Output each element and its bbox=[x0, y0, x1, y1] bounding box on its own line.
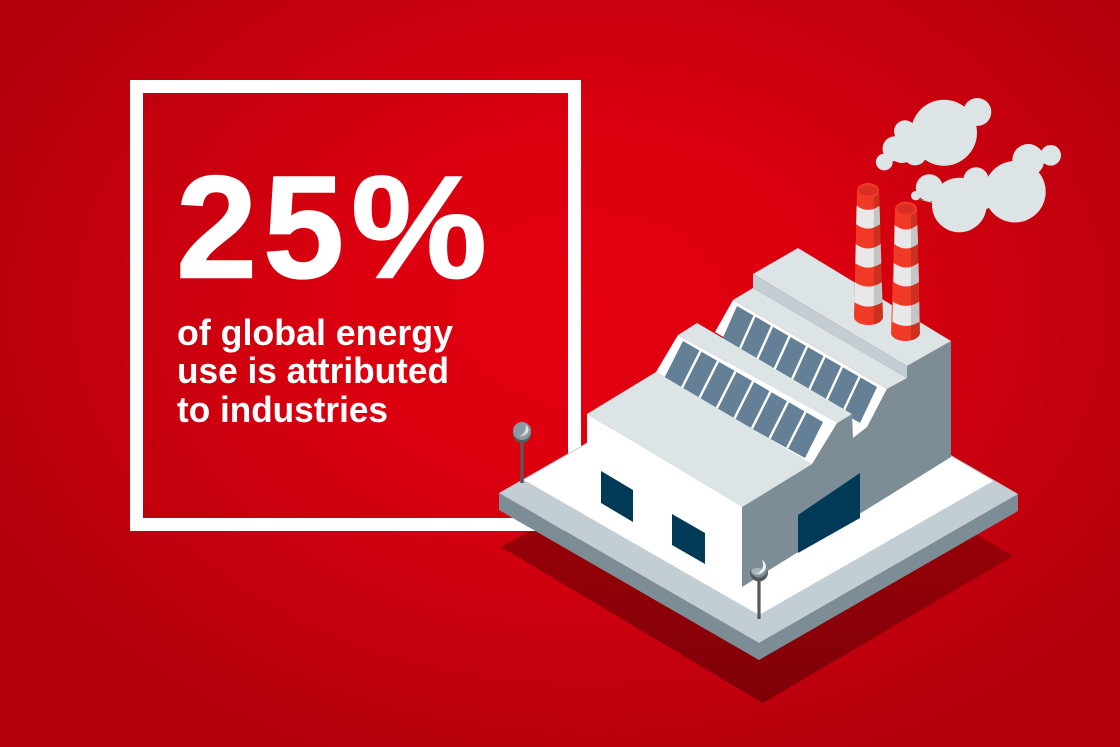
white slope behind rear solar row bbox=[715, 300, 887, 438]
description text bbox=[177, 312, 453, 430]
front roof bbox=[587, 372, 812, 507]
white slope behind front solar row bbox=[656, 335, 837, 464]
smoke cloud lower bbox=[911, 144, 1061, 232]
middle roof bbox=[733, 288, 907, 389]
headline: 25%: % bbox=[351, 146, 487, 308]
factory illustration bbox=[499, 98, 1061, 660]
lamp post left bbox=[513, 422, 531, 483]
window left bbox=[601, 471, 633, 522]
solar panels: rear row bbox=[721, 306, 877, 423]
window right bbox=[672, 514, 705, 564]
description text: to industries bbox=[177, 389, 388, 430]
solar panels: front row bbox=[663, 341, 823, 458]
chimney left bbox=[854, 183, 883, 325]
top roof bbox=[753, 248, 951, 366]
headline: 25%: 5 bbox=[263, 146, 344, 308]
headline: 25%: 2 bbox=[176, 146, 257, 308]
ground shadow bbox=[501, 470, 1013, 703]
headline: 25% bbox=[176, 146, 487, 308]
roof step face bbox=[753, 274, 907, 378]
white front wall bbox=[587, 414, 742, 600]
white square frame bbox=[136, 86, 574, 524]
lamp post right bbox=[750, 560, 768, 619]
platform bbox=[499, 344, 1018, 660]
description text: of global energy bbox=[177, 312, 453, 353]
smoke cloud upper bbox=[876, 98, 991, 170]
grey side wall bbox=[742, 341, 951, 587]
factory building bbox=[587, 248, 951, 600]
chimney right bbox=[891, 202, 920, 341]
description text: use is attributed bbox=[177, 350, 449, 391]
side door bbox=[798, 473, 860, 553]
lower roof strip bbox=[678, 323, 852, 423]
